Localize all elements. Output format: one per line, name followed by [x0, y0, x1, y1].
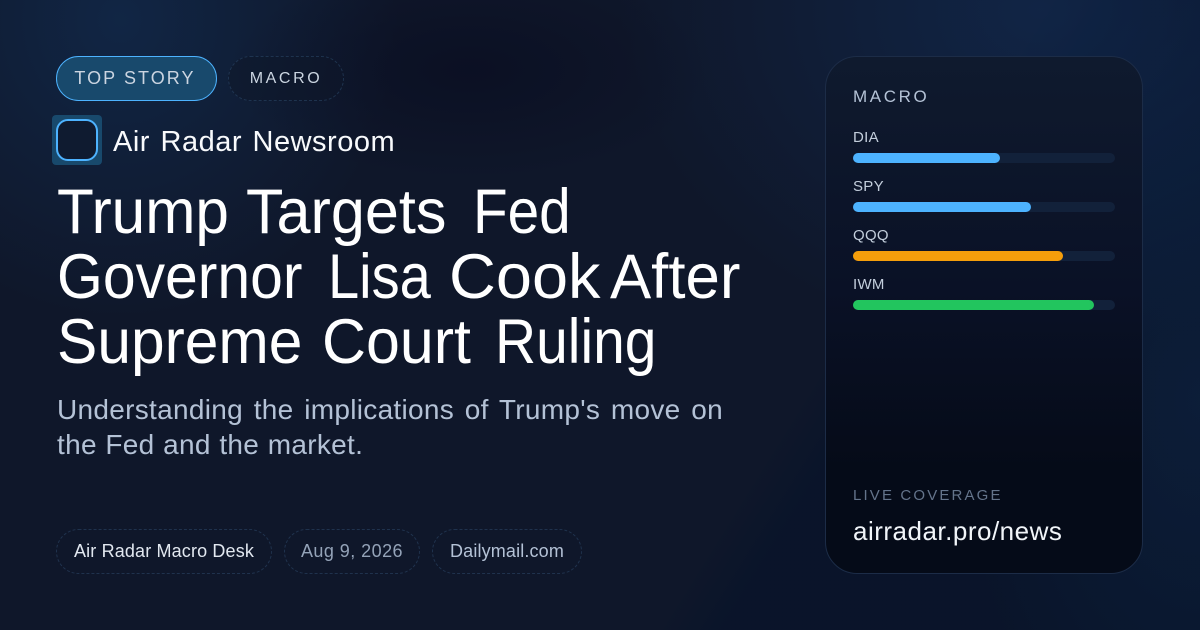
bar row: QQQ — [853, 227, 1115, 261]
headline: Fed — [473, 177, 571, 247]
tag: top story — [56, 56, 217, 101]
headline: Cook — [449, 242, 600, 312]
url: airradar.pro/news — [853, 516, 1062, 546]
chip: source — [432, 529, 582, 574]
bar — [853, 202, 1115, 212]
bar row: DIA — [853, 129, 1115, 163]
headline: Court — [322, 307, 471, 377]
headline: Trump — [57, 177, 229, 247]
bar — [853, 153, 1115, 163]
subheading: the Fed and the market. — [57, 429, 363, 460]
meta row — [56, 529, 582, 574]
icon: brand logo — [52, 115, 102, 165]
headline: Targets — [246, 177, 446, 247]
label: IWM — [853, 276, 885, 293]
brand row: Air Radar Newsroom — [52, 115, 395, 165]
headline: Ruling — [495, 307, 656, 377]
subheading — [57, 394, 723, 460]
label: SPY — [853, 178, 884, 195]
bar — [853, 251, 1115, 261]
headline: Supreme — [57, 307, 302, 377]
tag: macro: MACRO — [250, 70, 322, 87]
panel heading: MACRO — [853, 87, 929, 106]
tag: top story: TOP STORY — [74, 68, 196, 88]
brand name: Air Radar Newsroom — [113, 126, 395, 158]
bar — [853, 300, 1115, 310]
live coverage label: LIVE COVERAGE — [853, 487, 1003, 504]
chip: author — [56, 529, 272, 574]
chip: date: Aug 9, 2026 — [301, 541, 403, 561]
chip: author: Air Radar Macro Desk — [74, 541, 254, 561]
subheading: Understanding the implications of Trump's move on — [57, 394, 723, 425]
headline: After — [610, 242, 740, 312]
tag: macro — [228, 56, 344, 101]
label: QQQ — [853, 227, 889, 244]
panel: macro sidebar — [825, 56, 1143, 574]
bar row: SPY — [853, 178, 1115, 212]
headline: Lisa — [328, 242, 431, 312]
bar row: IWM — [853, 276, 1115, 310]
headline: Governor — [57, 242, 303, 312]
chip: source: Dailymail.com — [450, 541, 564, 561]
headline — [57, 177, 740, 377]
chip: date — [284, 529, 420, 574]
label: DIA — [853, 129, 879, 146]
